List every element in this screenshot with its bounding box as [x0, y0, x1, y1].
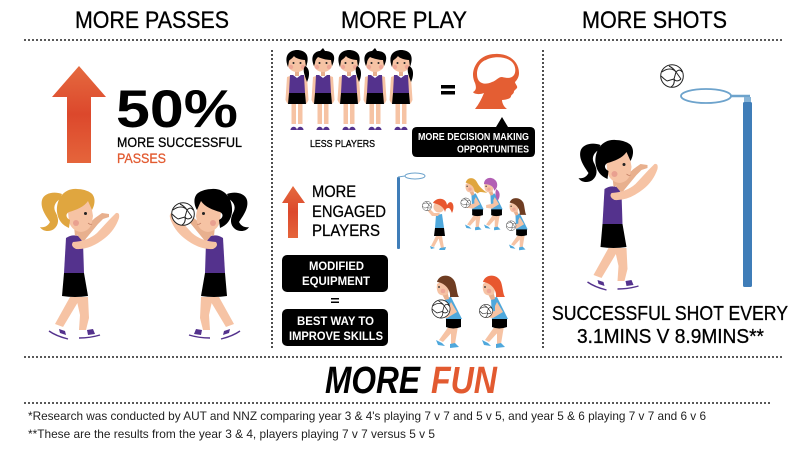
panel: more passes [40, 66, 249, 339]
figure: dark haired passer with ball [170, 189, 249, 339]
icon: small up arrow [282, 186, 305, 238]
figure: brown haired player with ball [432, 276, 462, 348]
statistic: 50%: 50% [116, 80, 238, 139]
callout: more decision making [412, 117, 535, 157]
box: modified equipment: EQUIPMENT [302, 274, 371, 288]
text: more engaged players: MORE [312, 182, 356, 201]
heading: more shots: MORE SHOTS [582, 7, 727, 34]
figure: purple haired player [484, 178, 503, 230]
text: more engaged players [312, 182, 386, 240]
figure: shooter [578, 140, 658, 290]
icon: netball post [681, 89, 752, 287]
label: less players: LESS PLAYERS [310, 138, 375, 150]
text: passes: PASSES [117, 150, 166, 166]
text: more engaged players: PLAYERS [312, 221, 380, 240]
figure: brown haired player right [506, 198, 528, 250]
figure: blonde passer [40, 189, 119, 339]
figures: five players [286, 48, 413, 130]
text: more engaged players: ENGAGED [312, 202, 386, 221]
box: modified equipment: MODIFIED [309, 259, 364, 273]
callout: more decision making: MORE DECISION MAKING [418, 131, 529, 143]
heading: more play: MORE PLAY [341, 7, 467, 34]
panel: more shots [552, 65, 788, 348]
icon: netball [661, 65, 683, 87]
icon: head with brain [473, 54, 519, 109]
figure: blonde player [461, 178, 487, 230]
title: more fun: MORE [325, 360, 421, 402]
panel: more play [282, 48, 535, 348]
box: best way to improve skills: IMPROVE SKILLS [289, 329, 383, 343]
box: modified equipment [282, 255, 388, 292]
text: successful shot stat: 3.1MINS V 8.9MINS** [577, 326, 764, 348]
heading: more passes: MORE PASSES [75, 7, 229, 34]
title: more fun [325, 360, 498, 402]
figure: red haired player with ball [479, 276, 508, 348]
footnote 1: *Research was conducted by AUT and NNZ comparing year 3 & 4's playing 7 v 7 and 5 v 5, and year 5 & 6 playing 7 v 7 and 6 v 6 [28, 409, 706, 423]
box: best way to improve skills: BEST WAY TO [297, 314, 374, 328]
icon: small netball post [397, 173, 425, 249]
footnote 2: **These are the results from the year 3 & 4, players playing 7 v 7 versus 5 v 5 [28, 427, 435, 441]
text: more successful: MORE SUCCESSFUL [117, 134, 242, 150]
text: successful shot stat [552, 303, 788, 348]
equals sign [331, 298, 339, 303]
title: more fun: FUN [431, 360, 498, 402]
figure: red haired shooter [422, 199, 453, 250]
callout: more decision making: OPPORTUNITIES [457, 144, 529, 156]
equals sign [441, 85, 455, 94]
icon: up arrow [52, 66, 106, 163]
box: best way to improve skills [282, 309, 388, 346]
